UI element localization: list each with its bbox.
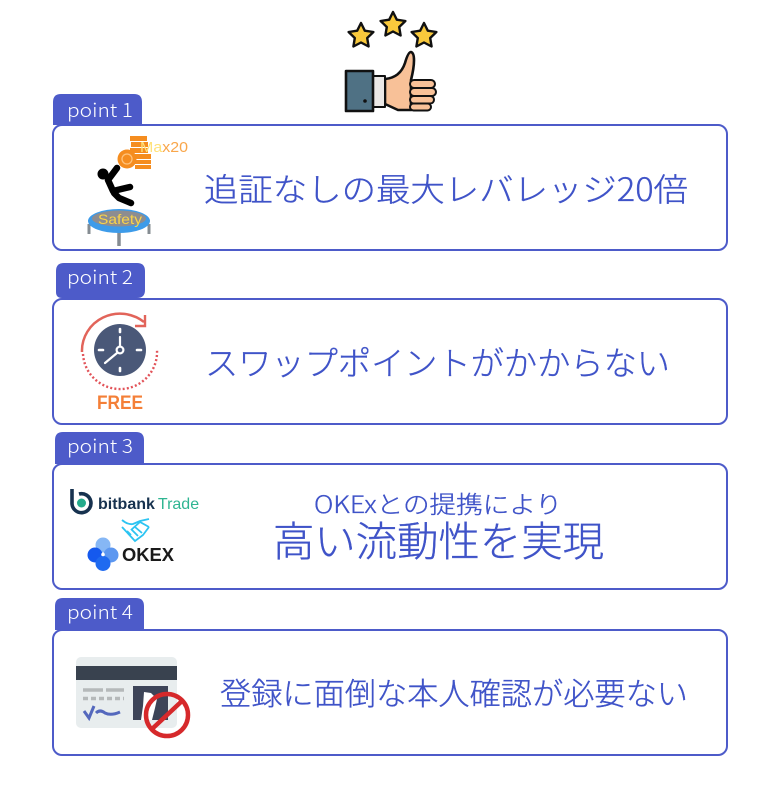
text: point 4 headline: 登録に面倒な本人確認が必要ない: [220, 669, 688, 714]
icon: ID card with prohibition sign: [76, 657, 188, 736]
ID card: [76, 657, 177, 728]
card frame: [53, 299, 727, 424]
label: Safety: Safety: [98, 211, 142, 227]
text: point 1 headline: 追証なしの最大レバレッジ20倍: [204, 165, 688, 211]
falling person: [100, 168, 131, 203]
signature: [84, 706, 120, 718]
logo: OKEX wordmark: OKEX: [122, 545, 174, 565]
tab: point 4: [55, 598, 144, 630]
trampoline: [88, 209, 150, 246]
photo: [133, 686, 168, 720]
icon: thumbs up hand: [346, 52, 436, 111]
tab: point 1: point 1: [67, 96, 133, 123]
panel: point 2: [53, 263, 727, 424]
card frame: [53, 630, 727, 755]
tab: point 1: [53, 94, 142, 125]
icon: three stars and thumbs up: [346, 12, 436, 111]
label: FREE: FREE: [97, 393, 143, 414]
tab: point 3: [55, 432, 144, 464]
panel: point 1: [53, 94, 727, 250]
icon: stars: [349, 12, 436, 46]
logo: OKEX mark: [88, 538, 118, 571]
clock hands: [99, 329, 141, 371]
tab: point 2: point 2: [67, 263, 133, 290]
tab: point 3: point 3: [67, 432, 133, 459]
text: point 2 headline: スワップポイントがかからない: [205, 337, 670, 385]
logos: bitbank Trade and OKEX: [72, 489, 199, 571]
panel: point 3: [53, 432, 727, 589]
prohibition sign: [146, 694, 188, 736]
red dotted arc: [83, 350, 157, 389]
text: point 3 headline: 高い流動性を実現: [273, 508, 604, 568]
card frame: [53, 464, 727, 589]
tab: point 2: [56, 263, 145, 298]
panel: point 4: [53, 598, 727, 755]
logo: bitbank mark: [72, 489, 91, 513]
text: point 3 subheading: OKExとの提携により: [314, 485, 562, 520]
coins: [118, 136, 151, 169]
label: Max20: Max20: [140, 139, 188, 156]
card frame: [53, 125, 727, 250]
icon: clock with FREE label: [82, 314, 157, 414]
tab: point 4: point 4: [67, 598, 133, 625]
icon: handshake: [122, 519, 149, 541]
clock face: [94, 324, 146, 376]
red arrow arc: [82, 314, 144, 352]
icon: falling person with coins and trampoline: [88, 136, 188, 246]
logo: bitbank Trade wordmark: bitbankTrade: [98, 496, 199, 513]
